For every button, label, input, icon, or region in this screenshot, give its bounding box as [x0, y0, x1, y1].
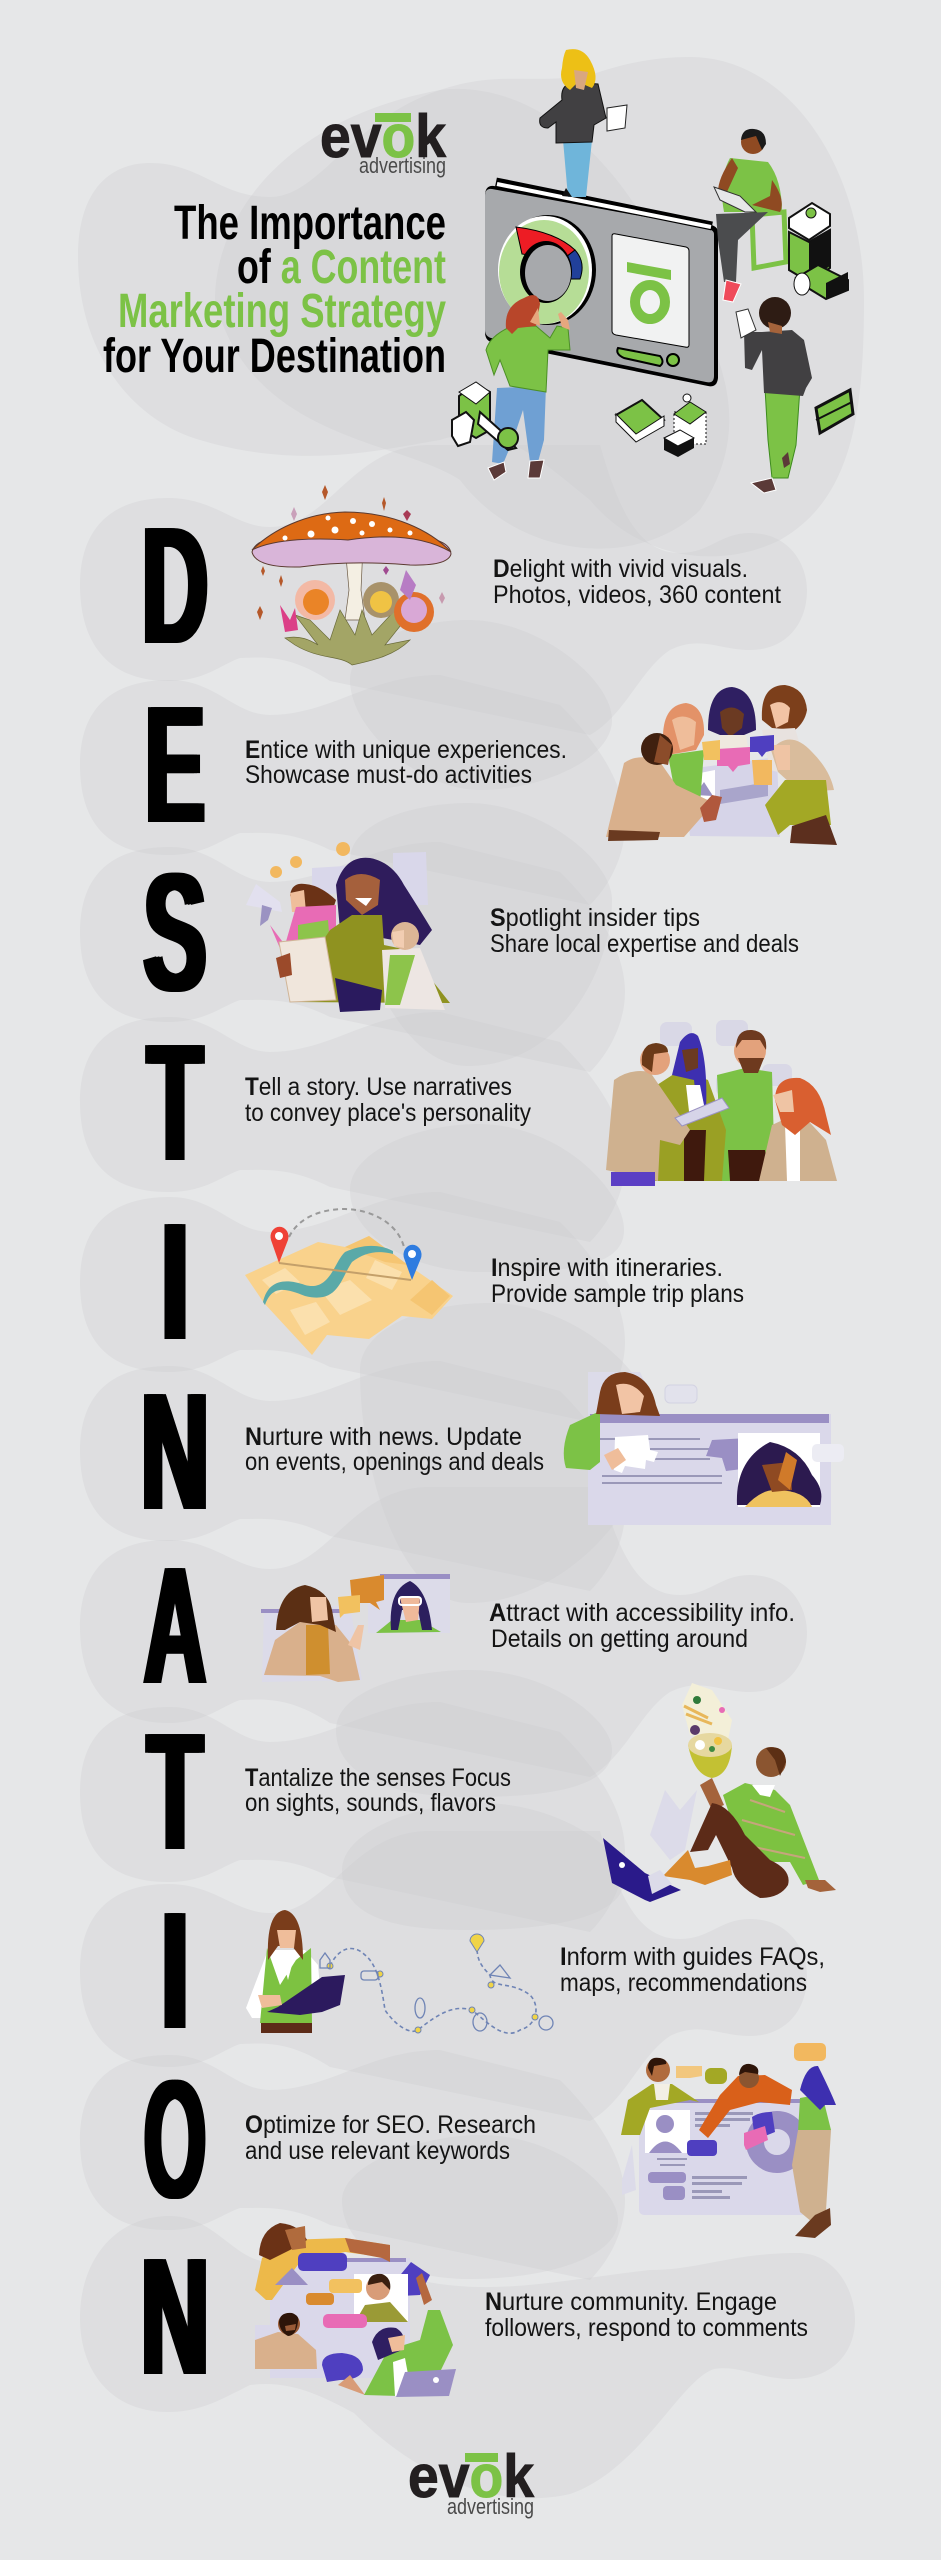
illustration: mushroom and flowers — [252, 485, 451, 665]
leaves — [285, 610, 410, 665]
figure: red-haired woman at donut chart — [486, 295, 570, 480]
icon: office equipment stack — [789, 203, 848, 299]
letter N: N — [141, 2224, 209, 2410]
text: delight — [493, 555, 781, 609]
text: tell: to convey place's personality — [245, 1099, 531, 1127]
illustration: folded map with pins — [245, 1209, 453, 1355]
illustration: woman with megaphone and team — [246, 842, 450, 1012]
letter S: S — [143, 839, 207, 1027]
title: The Importance — [174, 197, 446, 250]
text: tantalize — [245, 1764, 511, 1817]
text: spotlight: Share local expertise and deals — [490, 930, 799, 958]
illustration: man with floating ramen bowl and laptop — [603, 1683, 836, 1902]
icon: code bubble lower — [322, 2353, 363, 2382]
title — [103, 197, 446, 383]
icon: dashboard panel — [485, 182, 718, 386]
text: nurture community: followers, respond to comments — [485, 2314, 808, 2342]
text: attract: Attract with accessibility info. — [489, 1599, 795, 1627]
text: inspire: Provide sample trip plans — [491, 1280, 744, 1308]
text: inspire: Inspire with itineraries. — [491, 1254, 723, 1282]
letter A: A — [144, 1533, 206, 1719]
text: inspire — [491, 1254, 744, 1308]
figure: blonde woman — [540, 49, 627, 197]
illustration: community video call collage — [255, 2223, 456, 2397]
text: delight: Delight with vivid visuals. — [493, 555, 748, 583]
logo: evok advertising header: evōk — [320, 103, 447, 170]
illustration: woman with laptop and dashed travel route — [246, 1910, 553, 2033]
text: attract — [489, 1599, 795, 1653]
sparkles — [257, 485, 445, 620]
letter N: N — [141, 1359, 209, 1545]
letter E: E — [145, 672, 205, 858]
text: nurture news: Nurture with news. Update — [245, 1423, 522, 1451]
stem — [345, 545, 365, 620]
text: optimize: and use relevant keywords — [245, 2137, 510, 2165]
illustration: group discussion with tablet — [606, 1020, 837, 1186]
logo: evok advertising footer: advertising — [447, 2494, 534, 2519]
text: inform — [560, 1943, 825, 1997]
letter O: O — [144, 2046, 206, 2234]
icon: briefcase — [816, 390, 853, 433]
text: nurture news: on events, openings and deals — [245, 1448, 544, 1476]
letter I: I — [161, 1189, 189, 1375]
text: optimize: Optimize for SEO. Research — [245, 2111, 536, 2139]
title: of a Content — [237, 241, 446, 294]
logo: evok advertising header: advertising — [359, 153, 446, 178]
illustration: isometric dashboard team — [452, 49, 853, 493]
icon: code bubble — [392, 2262, 430, 2296]
text: entice: Showcase must-do activities — [245, 761, 532, 789]
icon: stacked paper and books — [616, 394, 706, 457]
text: tell: Tell a story. Use narratives — [245, 1073, 512, 1101]
text: spotlight: Spotlight insider tips — [490, 904, 700, 932]
title: for Your Destination — [103, 330, 446, 383]
title: Marketing Strategy — [118, 285, 446, 338]
icon: message bubble — [298, 2253, 347, 2271]
text: nurture community — [485, 2288, 808, 2342]
gills and cap — [252, 537, 451, 567]
letter I: I — [161, 1878, 189, 2064]
text: nurture news — [245, 1423, 544, 1476]
letter D: D — [142, 493, 208, 679]
flowers — [295, 580, 335, 620]
icon: red pin — [270, 1227, 288, 1263]
icon: code bubble — [687, 2140, 717, 2156]
illustration: video chat women — [261, 1574, 450, 1682]
text: delight: Photos, videos, 360 content — [493, 581, 781, 609]
text: optimize — [245, 2111, 536, 2165]
icon: purple laptop — [603, 1838, 681, 1902]
text: tantalize: Tantalize the senses Focus — [245, 1764, 511, 1792]
figure: seated person with laptop — [714, 129, 786, 302]
text: tell — [245, 1073, 531, 1127]
letter T: T — [147, 1699, 203, 1885]
illustration: team with seo dashboard — [621, 2043, 836, 2238]
icon: stacked boxes left — [452, 382, 518, 450]
text: entice: Entice with unique experiences. — [245, 736, 567, 764]
text: tantalize: on sights, sounds, flavors — [245, 1789, 496, 1817]
illustration: woman assembling puzzle window — [564, 1372, 844, 1525]
figure: man in grey sweater — [736, 297, 812, 493]
text: inform: Inform with guides FAQs, — [560, 1943, 825, 1971]
icon: blue pin — [404, 1245, 422, 1280]
logo: evok advertising footer: evōk — [408, 2443, 535, 2510]
icon: yellow pin — [470, 1934, 484, 1952]
text: attract: Details on getting around — [491, 1625, 748, 1653]
text: inform: maps, recommendations — [560, 1969, 807, 1997]
letter T: T — [147, 1010, 203, 1196]
text: entice — [245, 736, 567, 789]
text: spotlight — [490, 904, 799, 958]
text: nurture community: Nurture community. Engage — [485, 2288, 777, 2316]
illustration: team around screen — [606, 685, 837, 845]
